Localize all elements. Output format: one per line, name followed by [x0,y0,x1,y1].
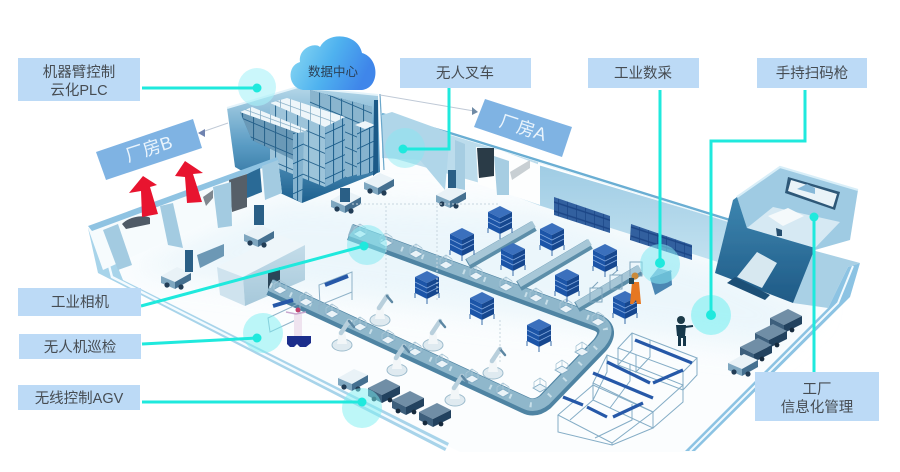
material frames [558,333,697,445]
factory scene [88,87,860,452]
forklifts [161,170,466,290]
wall racks [554,197,610,233]
AGV vehicles lower left [338,369,451,427]
rear wall right [538,165,730,262]
red arrow 2 [175,161,203,203]
floor edge right [685,263,860,451]
side conveyors [468,224,642,307]
label: industrial camera: 工业相机 [51,294,109,311]
blue racks [415,206,672,352]
office [715,167,858,303]
cloud: data center: 数据中心 [308,64,358,79]
label: industrial data acquisition [588,58,699,88]
label: industrial camera [18,288,141,316]
middle stack [270,103,325,187]
label: factory information management: 信息化管理 [781,399,854,416]
label: handheld scanner: 手持扫码枪 [776,65,848,82]
floor edge left [88,228,449,451]
cloud: data center [291,36,376,90]
back rack [310,90,372,178]
label: drone inspection [19,334,141,359]
plant B sign: 厂房B [123,132,175,166]
label: robot arm cloud PLC [18,58,140,101]
dotted lines [352,204,500,362]
big white box [217,235,305,306]
right side wall [793,250,860,308]
AGV vehicles right [728,309,802,377]
arrow: data link to plant B [198,123,228,137]
label: unmanned forklift: 无人叉车 [436,65,494,82]
left wall [88,157,282,270]
left rack [240,112,298,162]
label: factory information management [755,372,879,421]
arrow: data link to plant A [380,95,478,115]
label: robot arm cloud PLC: 机器臂控制 [43,64,115,81]
label: handheld scanner [757,58,867,88]
main conveyor [270,230,606,407]
callout lines [141,84,818,406]
conveyor items [273,224,605,397]
drone [286,308,311,347]
label: industrial data acquisition: 工业数采 [614,65,672,82]
red arrow 1 [129,176,158,217]
label: drone inspection: 无人机巡检 [44,339,116,356]
wall inner partition [382,112,450,190]
robot arms [332,296,505,406]
worker with scanner [676,316,693,346]
label: factory information management: 工厂 [802,382,832,398]
label: robot arm cloud PLC: 云化PLC [50,82,108,99]
plant A sign: 厂房A [497,111,549,145]
plant A sign [474,99,572,157]
rear wall with doors [382,115,538,205]
workstation frames [268,272,352,332]
halos [238,68,731,428]
factory floor [88,150,860,452]
orange worker [629,272,641,304]
label: wireless AGV: 无线控制AGV [35,390,124,407]
plant B sign [96,119,202,180]
label: unmanned forklift [400,58,531,88]
warehouse [227,87,380,203]
label: wireless AGV [18,385,140,410]
pillar stack [357,124,374,176]
